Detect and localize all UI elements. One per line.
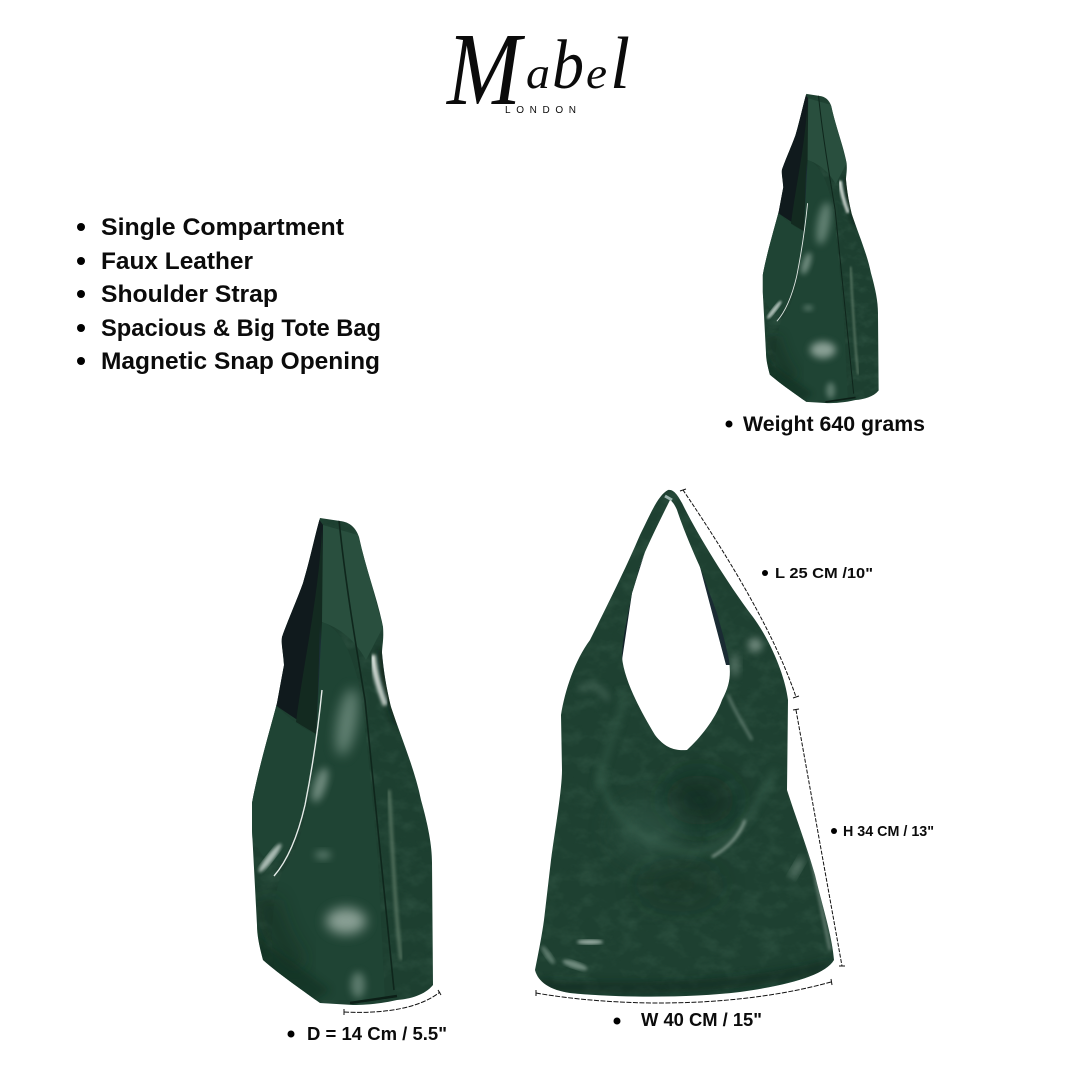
feature: single compartment: Single Compartment [101,214,344,241]
feature: magnetic snap opening: Magnetic Snap Opening [101,348,380,375]
feature: shoulder strap: Shoulder Strap [101,281,278,308]
logo: Mabel London: l [610,23,630,105]
front-view bag photo [530,485,840,1000]
dimension line: strap length [680,489,799,698]
large side-view bag photo [245,510,440,1010]
logo: Mabel London: e [586,49,607,98]
feature: big tote bag: Spacious & Big Tote Bag [101,315,381,342]
dimension line: depth [344,990,441,1015]
small side-view bag photo [758,89,883,406]
logo: Mabel London: a [526,49,550,98]
dimension line: width [536,979,832,1003]
label: strap length: L 25 CM /10" [775,565,873,582]
feature: faux leather: Faux Leather [101,248,253,275]
logo: Mabel London: LONDON [505,105,576,116]
shading [666,878,698,894]
label: depth: D = 14 Cm / 5.5" [307,1024,447,1044]
label: height: H 34 CM / 13" [843,823,934,840]
logo: Mabel London: M [445,12,526,127]
weight label: Weight 640 grams [743,413,925,436]
label: width: W 40 CM / 15" [641,1010,762,1030]
logo: Mabel London: b [552,27,584,104]
feature list [77,214,381,375]
dimension line: height [793,709,845,966]
logo: Mabel London [445,12,630,127]
